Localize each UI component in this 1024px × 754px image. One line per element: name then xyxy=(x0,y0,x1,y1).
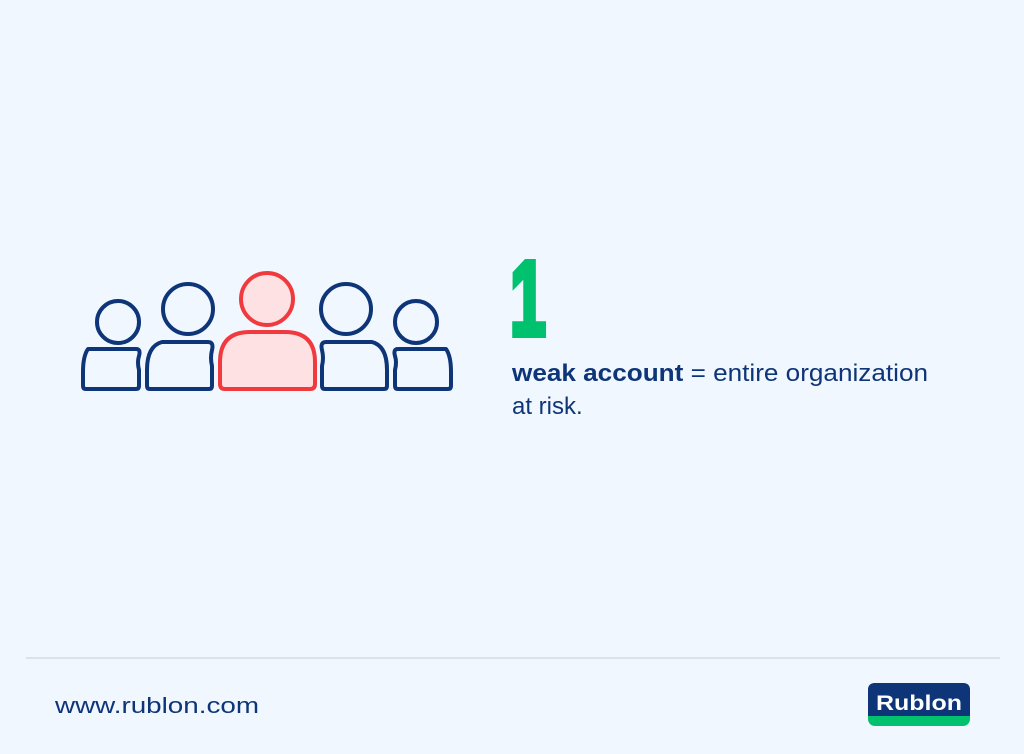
footer url: www.rublon.com xyxy=(54,693,259,718)
statement text xyxy=(511,360,928,420)
icon: group of people xyxy=(83,273,451,389)
logo xyxy=(868,683,970,726)
person 1 xyxy=(83,301,140,389)
logo: Rublon xyxy=(876,692,962,715)
statement text: weak account = entire organization xyxy=(511,360,928,387)
person 5 xyxy=(394,301,451,389)
person 4 xyxy=(321,284,387,389)
person 3 (highlighted) xyxy=(220,273,315,389)
person 2 xyxy=(147,284,213,389)
statement text: at risk. xyxy=(512,393,583,420)
big number: 1 xyxy=(510,240,546,358)
